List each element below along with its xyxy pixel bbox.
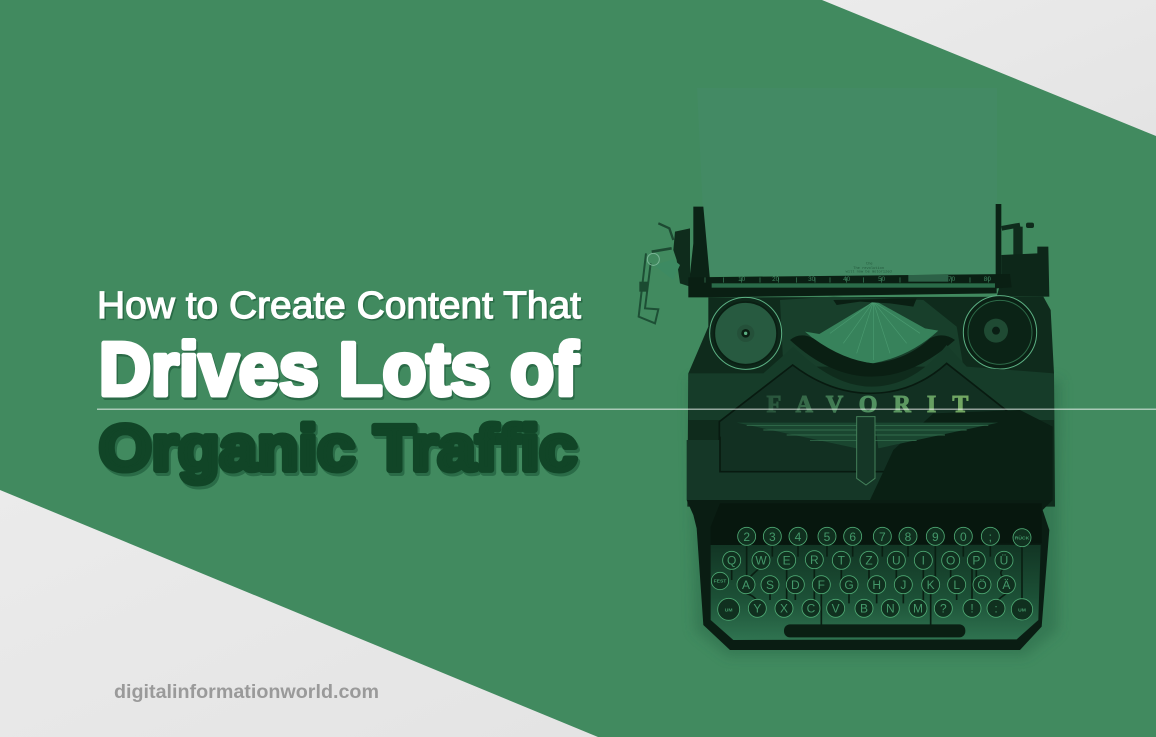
carriage ruler: 10	[738, 276, 746, 283]
key row: QWERTZ: Ü	[1000, 554, 1008, 568]
typewriter upper carriage	[639, 204, 1055, 507]
type-bar fan	[805, 301, 938, 363]
key stems	[732, 543, 1022, 625]
lighter panel behind spools	[780, 297, 963, 367]
key row: ASDF: K	[927, 578, 935, 592]
type-bar fan hinge	[833, 298, 917, 307]
heading line 1: How to Create Content That	[98, 286, 583, 328]
key row: numbers	[738, 527, 1031, 547]
carriage ruler: 50	[878, 276, 886, 283]
carriage ruler	[688, 274, 1012, 297]
key row: YXCV: B	[860, 602, 868, 616]
key row: ASDF: Ö	[977, 578, 987, 592]
typed lines on paper	[846, 262, 892, 275]
typed lines on paper: The revolution	[853, 266, 884, 271]
key row: QWERTZ: E	[783, 554, 791, 568]
key row: YXCV: !	[970, 602, 974, 616]
heading line 2: Drives Lots of	[100, 330, 580, 414]
key row: numbers: 8	[905, 530, 912, 544]
right carriage mechanism	[996, 204, 1049, 297]
carriage ruler: 40	[843, 276, 851, 283]
key row: numbers: 5	[824, 530, 831, 544]
key row: numbers: ;	[989, 530, 992, 544]
body reflection	[870, 410, 1053, 500]
title	[97, 285, 583, 487]
key row: ASDF: F	[818, 578, 825, 592]
plate bottom edge	[720, 437, 1020, 472]
keyboard well	[711, 545, 1041, 640]
key row: numbers: 9	[932, 530, 939, 544]
key row: numbers: 4	[795, 530, 802, 544]
key row: ASDF	[711, 572, 1015, 594]
key row: YXCV	[718, 598, 1033, 620]
key row: YXCV: ?	[940, 602, 947, 616]
key row: QWERTZ	[723, 551, 1013, 569]
key row: ASDF: D	[791, 578, 800, 592]
carriage ruler: 80	[984, 276, 991, 283]
lower body	[687, 440, 1053, 500]
light corner: top right	[822, 0, 1156, 136]
key row: numbers: 0	[960, 530, 967, 544]
typewriter illustration	[639, 88, 1060, 656]
key row: QWERTZ: T	[838, 554, 846, 568]
left ribbon spool	[710, 297, 782, 369]
heading line 2: Drives Lots of	[99, 327, 579, 411]
typed lines on paper: will now be motorized	[846, 270, 892, 275]
key row: YXCV: N	[886, 602, 895, 616]
key row: ASDF: Ä	[1002, 578, 1010, 592]
key row: numbers: 2	[743, 530, 750, 544]
divider line	[97, 408, 1156, 410]
key row: ASDF: FEST	[714, 579, 726, 585]
key row: numbers: 6	[849, 530, 856, 544]
key row: YXCV: UM	[1018, 607, 1026, 613]
key row: YXCV: UM	[725, 607, 733, 613]
typewriter badge	[737, 392, 998, 485]
key row: ASDF: A	[742, 578, 750, 592]
typewriter soft shadow	[690, 380, 1060, 656]
keyboard frame	[687, 500, 1053, 650]
key row: YXCV: M	[913, 602, 923, 616]
key row: ASDF: J	[900, 578, 906, 592]
key row: numbers: 3	[769, 530, 776, 544]
key row: QWERTZ: R	[810, 553, 819, 567]
key row: QWERTZ: O	[946, 554, 955, 568]
key row: numbers: 7	[879, 530, 886, 544]
carriage ruler: 30	[808, 276, 816, 283]
typewriter keyboard	[687, 410, 1053, 650]
key row: numbers: RÜCK	[1015, 534, 1030, 541]
paper sheet	[697, 88, 997, 276]
key row: QWERTZ: U	[892, 554, 901, 568]
key row: YXCV: C	[807, 602, 816, 616]
machine body	[687, 297, 1055, 507]
left carriage mechanism	[639, 207, 710, 323]
space bar	[784, 624, 965, 637]
heading line 3: Organic Traffic	[99, 412, 577, 484]
right ribbon spool	[963, 296, 1037, 369]
heading line 3: Organic Traffic	[101, 415, 579, 487]
key row: ASDF: L	[953, 578, 960, 592]
key row: ASDF: H	[872, 578, 881, 592]
key row: QWERTZ: Q	[727, 554, 736, 568]
source url: digitalinformationworld.com	[114, 682, 379, 703]
heading line 1: How to Create Content That	[97, 285, 581, 327]
body plate base	[720, 437, 1020, 472]
typed lines on paper: the	[866, 262, 873, 267]
key row: QWERTZ: W	[755, 554, 767, 568]
carriage ruler: 20	[772, 276, 780, 283]
second curved band	[688, 345, 1054, 420]
body front plate	[719, 363, 1021, 470]
key row: YXCV: X	[780, 602, 788, 616]
upper keyboard shadow	[711, 503, 1042, 545]
carriage ruler: 70	[948, 276, 956, 283]
key row: QWERTZ: I	[922, 554, 925, 568]
dark curved band	[790, 335, 955, 377]
FAVORIT lettering: FAVORIT	[767, 392, 968, 418]
key row: ASDF: G	[844, 578, 854, 592]
wing emblem	[737, 417, 998, 485]
key row: QWERTZ: P	[972, 554, 980, 568]
key row: YXCV: Y	[753, 602, 761, 616]
key row: YXCV: :	[994, 602, 998, 616]
key row: YXCV: V	[832, 602, 840, 616]
key row: QWERTZ: Z	[865, 554, 873, 568]
light corner: bottom left	[0, 490, 598, 737]
key row: ASDF: S	[766, 578, 774, 592]
